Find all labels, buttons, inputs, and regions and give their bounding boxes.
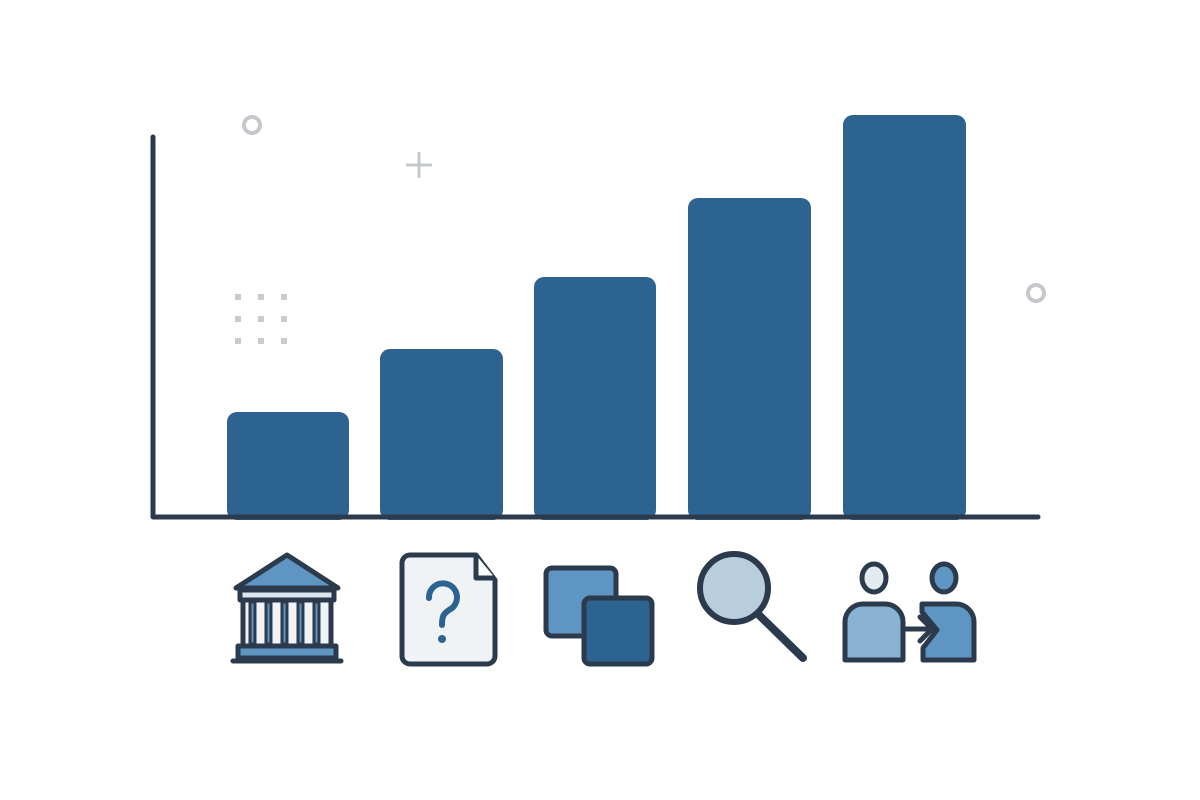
axes [153, 137, 1038, 517]
decoration: plus [406, 152, 432, 178]
icon: question document [402, 555, 495, 664]
icon: overlapping squares [546, 568, 652, 664]
decoration: dot grid [235, 294, 287, 344]
decoration: circle right [1028, 285, 1044, 301]
icon: bank [233, 555, 341, 661]
bar chart [227, 115, 966, 520]
decoration: circle [244, 117, 260, 133]
icon: magnifier [700, 554, 803, 658]
icon: people transfer [845, 564, 974, 660]
